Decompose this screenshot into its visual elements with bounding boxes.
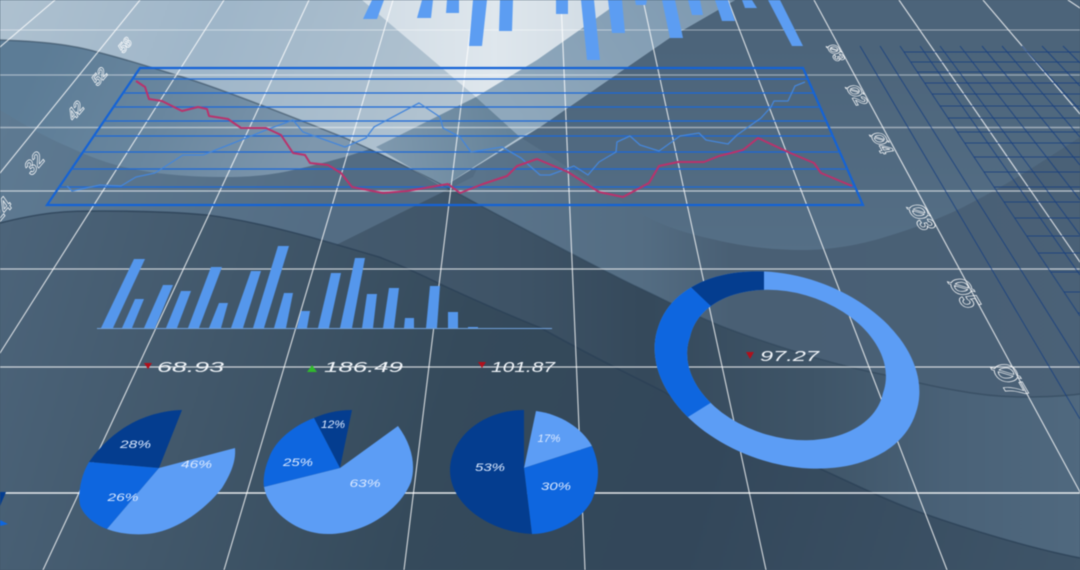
blue series: [67, 82, 805, 191]
indicator: 68.93: 68.93: [157, 359, 225, 376]
axis labels right: Ø4: [865, 131, 899, 156]
axis labels right: Ø2: [841, 83, 873, 107]
pie chart 2: 12%: [321, 419, 345, 431]
pie chart 2: [264, 410, 413, 534]
axis labels right: Ø5: [941, 276, 987, 310]
pie chart 1: 46%: [181, 459, 212, 471]
pie chart 2: 25%: [282, 457, 313, 469]
donut chart: 97.27: [760, 348, 820, 365]
pie chart 3: 53%: [475, 462, 505, 474]
pie chart 3: [450, 410, 598, 534]
axis labels right: Ø7: [983, 361, 1035, 399]
pie chart 1: 28%: [119, 439, 151, 451]
pie chart 1: 26%: [106, 492, 139, 504]
axis labels right: [822, 43, 1035, 399]
bars: [101, 246, 478, 328]
axis labels left: [0, 33, 134, 228]
indicator: 186.49: 186.49: [324, 359, 404, 376]
pie chart fragment at left edge: [0, 492, 8, 526]
indicator: 101.87: 101.87: [491, 359, 556, 376]
pie chart 3: 30%: [541, 481, 571, 493]
pie chart 2: 63%: [350, 478, 381, 490]
axis labels left: 58: [116, 33, 134, 57]
axis labels left: 32: [22, 147, 48, 181]
red series: [136, 81, 852, 197]
axis labels right: Ø3: [901, 202, 943, 232]
axis labels left: 42: [65, 97, 87, 125]
donut chart: [654, 270, 920, 470]
axis labels right: Ø3: [822, 43, 848, 63]
indicator: 68.93: [144, 359, 225, 376]
axis labels left: 52: [90, 64, 110, 90]
pie chart 3: 17%: [538, 433, 561, 445]
chart frame: [47, 68, 863, 205]
mesh grid at right: [860, 46, 1080, 419]
chart rows: [59, 79, 855, 187]
indicator: 101.87: [478, 359, 556, 376]
bar chart: top, hanging bars: [363, 0, 803, 60]
bar chart: middle: [97, 246, 552, 328]
baseline: [97, 328, 552, 330]
line chart: [47, 68, 863, 205]
pie chart 1: [79, 410, 235, 534]
indicator: 186.49: [307, 359, 404, 376]
